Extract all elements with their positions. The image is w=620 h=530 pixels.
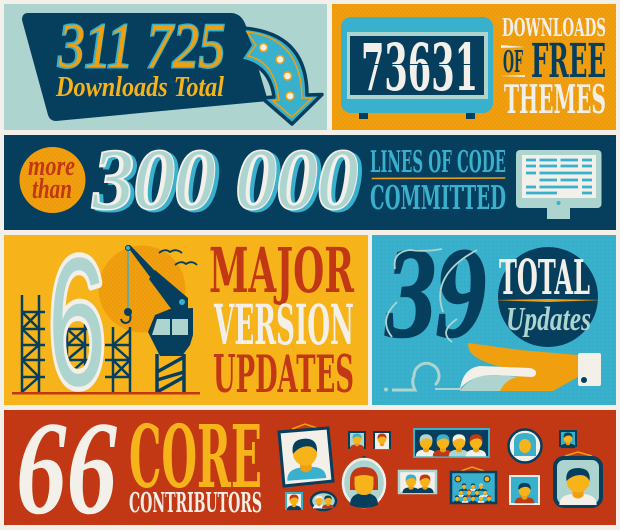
- portrait: large tilted: [279, 424, 333, 486]
- panel: total updates: [372, 222, 616, 405]
- icon: sign board: [22, 13, 268, 121]
- panel: downloads of free themes: OF: [503, 45, 523, 80]
- badge: more than: [20, 147, 86, 213]
- big number 6: 6: [48, 219, 106, 424]
- icon: computer monitor: [516, 150, 602, 219]
- panel: core contributors: CORE: [129, 407, 262, 508]
- portrait: square teal: [510, 476, 539, 504]
- portrait: cream couple frame: [399, 471, 436, 493]
- badge: more than: than: [32, 174, 72, 205]
- panel: major version updates: VERSION: [214, 292, 354, 357]
- portrait: group photo: [451, 467, 496, 503]
- icon: birds: [159, 250, 197, 265]
- portrait: small blue: [349, 432, 365, 449]
- portrait: small top right: [560, 431, 576, 448]
- portrait: family of four: [414, 429, 489, 457]
- portrait: oval red hair: [343, 456, 385, 508]
- icon: crane: [121, 245, 193, 392]
- panel: lines of code: [4, 131, 616, 230]
- badge: more than: more: [28, 151, 75, 182]
- badge: total updates: [492, 247, 603, 347]
- ground line: [12, 392, 200, 394]
- heading: of: [500, 45, 525, 80]
- panel: downloads total: [4, 4, 327, 130]
- icon: hand: [460, 343, 601, 391]
- sun: [98, 246, 186, 332]
- icon: curved arrow: [240, 28, 322, 124]
- number: 311 725: 311 725: [58, 11, 225, 81]
- portrait: oval couple: [311, 492, 336, 510]
- scaffolding: [22, 295, 131, 392]
- number: 39: 39: [385, 222, 486, 364]
- number: 300 000: 300 000: [96, 133, 362, 229]
- panel: downloads of free themes: [332, 4, 616, 130]
- icon: counter display: [341, 17, 493, 119]
- number: 73631: 73631: [361, 30, 478, 106]
- label: committed: COMMITTED: [370, 178, 506, 217]
- panel: major version updates: [4, 219, 368, 424]
- number: 311 725: 311 725: [57, 11, 225, 81]
- badge: total updates: Updates: [506, 301, 591, 338]
- heading: updates: UPDATES: [213, 345, 354, 405]
- heading: major: MAJOR: [209, 234, 355, 307]
- number: 300 000: 300 000: [92, 131, 358, 227]
- icon: swirl line: [384, 363, 461, 392]
- number: 300 000: 300 000: [92, 131, 358, 227]
- portrait: small cream: [374, 432, 390, 449]
- portrait: large right: [555, 452, 601, 506]
- portrait: round blue hair: [508, 430, 542, 462]
- label: downloads total: Downloads Total: [55, 71, 225, 103]
- portrait: small bottom left: [286, 493, 302, 510]
- panel: core contributors: [4, 394, 616, 530]
- heading: contributors: CONTRIBUTORS: [129, 488, 262, 519]
